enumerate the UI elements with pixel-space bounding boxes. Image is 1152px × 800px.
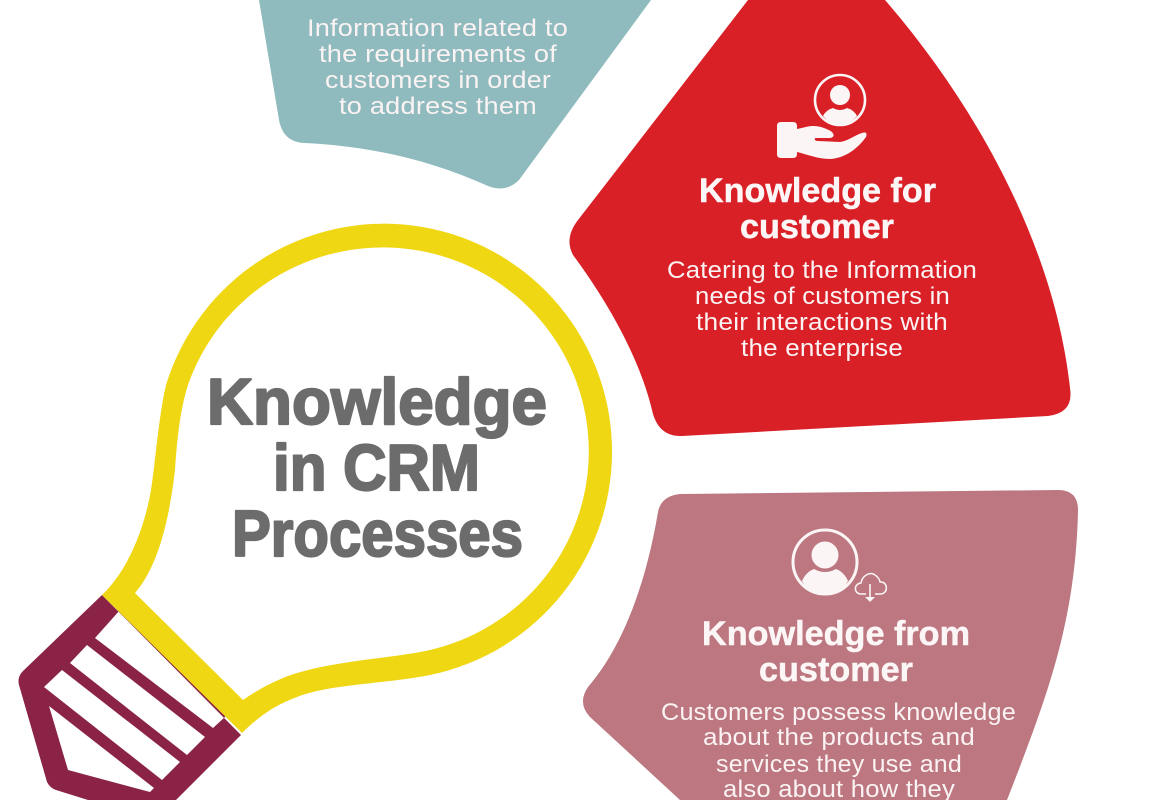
text block: for customer description: the enterprise xyxy=(741,335,903,362)
icon: light bulb xyxy=(18,224,612,800)
text block: requirements description: to address them xyxy=(339,93,537,120)
title: in CRM xyxy=(273,431,480,504)
panel shape: rose xyxy=(583,490,1078,800)
heading: knowledge for customer: customer xyxy=(740,208,894,246)
text block: requirements description: customers in order xyxy=(325,67,551,94)
text block: for customer description: their interactions with xyxy=(696,309,948,336)
panel: knowledge from customer xyxy=(583,490,1078,800)
title xyxy=(207,365,547,570)
text block: requirements description: the requirements of xyxy=(319,41,557,68)
heading: knowledge for customer: Knowledge for xyxy=(699,172,936,210)
text block: requirements description: Information related to xyxy=(307,15,568,42)
heading: knowledge for customer xyxy=(699,172,936,246)
heading: knowledge from customer: customer xyxy=(759,651,913,689)
heading: knowledge from customer: Knowledge from xyxy=(702,615,970,653)
text block: from customer description: about the products and xyxy=(703,724,975,751)
icon: hand holding person xyxy=(777,75,866,159)
text block: for customer description xyxy=(667,257,977,362)
title: Processes xyxy=(232,497,523,570)
title: Knowledge xyxy=(207,365,547,438)
text block: requirements description xyxy=(307,15,568,120)
heading: knowledge from customer xyxy=(702,615,970,689)
panel shape: red xyxy=(569,0,1071,436)
text block: from customer description xyxy=(661,699,1016,800)
panel shape: teal xyxy=(259,0,651,188)
bulb base xyxy=(18,595,241,800)
bulb glass outline xyxy=(102,224,612,733)
icon: person with cloud download xyxy=(793,530,886,602)
text block: for customer description: needs of customers in xyxy=(695,283,950,310)
panel: customer requirements xyxy=(259,0,651,188)
text block: for customer description: Catering to the Information xyxy=(667,257,977,284)
panel: knowledge for customer xyxy=(569,0,1071,436)
text block: from customer description: Customers possess knowledge xyxy=(661,699,1016,726)
text block: from customer description: services they use and xyxy=(716,751,962,778)
